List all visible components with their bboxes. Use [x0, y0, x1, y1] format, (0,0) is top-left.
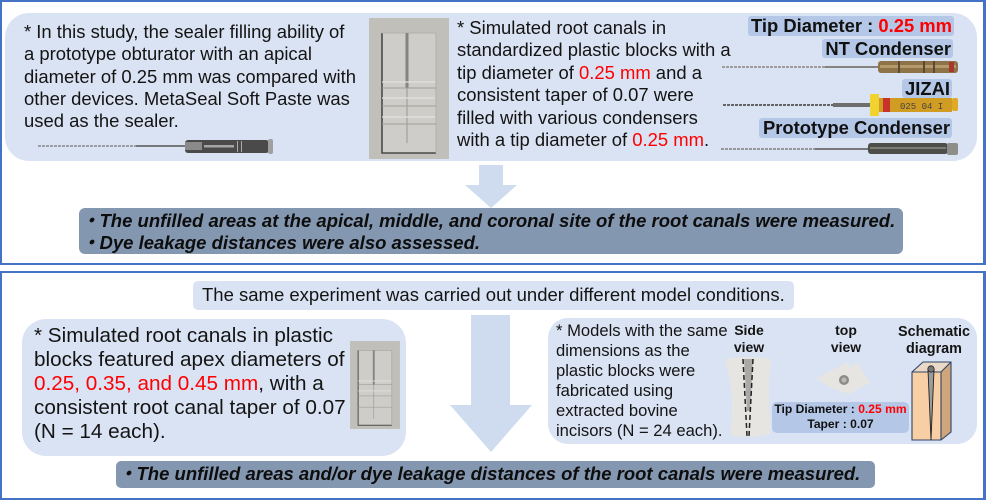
panel: top result	[79, 208, 903, 254]
text: plastic block models: consistent root canal taper of 0.07	[34, 396, 346, 419]
text: bovine incisor models: dimensions as the	[556, 341, 690, 360]
text: bovine incisor models: fabricated using	[556, 381, 673, 400]
panel: top experiment frame	[0, 0, 986, 265]
heading: top view: top	[835, 322, 857, 338]
image: plastic block	[369, 18, 449, 159]
text: study aim: diameter of 0.25 mm was compared with	[24, 66, 356, 87]
text: top result: ・The unfilled areas at the apical, middle, and coronal site of the root canals were measured.	[81, 210, 895, 231]
panel: conditions heading	[193, 281, 794, 310]
heading: side view: view	[734, 339, 764, 355]
text: study aim: other devices. MetaSeal Soft Paste was	[24, 88, 350, 109]
text: simulated root canals: * Simulated root canals in	[457, 16, 666, 38]
label: NT Condenser: NT Condenser	[825, 38, 951, 59]
text: conditions heading: The same experiment was carried out under different model conditions.	[202, 284, 785, 305]
text: simulated root canals	[457, 16, 731, 150]
text: study aim: used as the sealer.	[24, 110, 179, 131]
label: tip diameter: Tip Diameter : 0.25 mm	[751, 15, 952, 36]
panel: plastic block models	[22, 319, 406, 456]
heading: side view: Side	[734, 322, 764, 338]
text: bovine incisor models: incisors (N = 24 each).	[556, 421, 722, 440]
text: study aim: * In this study, the sealer filling ability of	[24, 21, 344, 42]
text: top result	[81, 210, 895, 253]
text: simulated root canals: consistent taper of 0.07 were	[457, 84, 694, 105]
text: simulated root canals: with a tip diameter of 0.25 mm.	[457, 129, 709, 150]
panel: bottom result	[116, 461, 875, 488]
text: top result: ・Dye leakage distances were also assessed.	[81, 232, 480, 253]
label: JIZAI: JIZAI	[905, 78, 950, 99]
text: bovine incisor models: plastic blocks were	[556, 361, 695, 380]
label: Prototype Condenser: Prototype Condenser	[763, 117, 950, 138]
text: bovine incisor models: * Models with the same	[556, 321, 728, 340]
image: tooth top view	[818, 362, 870, 394]
panel: bovine incisor models	[548, 318, 977, 444]
icon: prototype condenser instrument	[721, 143, 958, 155]
image: tooth side view	[725, 357, 771, 437]
heading: top view: view	[831, 339, 861, 355]
label: tip diameter and taper: Taper : 0.07	[807, 417, 874, 431]
text: simulated root canals: standardized plastic blocks with a	[457, 39, 731, 60]
arrow: top flow	[465, 165, 517, 208]
arrow: bottom flow	[450, 315, 532, 452]
text: bovine incisor models	[556, 321, 728, 440]
text: simulated root canals: tip diameter of 0.25 mm and a	[457, 62, 702, 83]
text: bottom result: ・The unfilled areas and/or dye leakage distances of the root canals were measured.	[118, 463, 860, 484]
icon: prototype obturator	[38, 139, 273, 154]
panel: bottom experiment frame	[0, 271, 986, 500]
text: study aim: a prototype obturator with an apical	[24, 43, 312, 64]
heading: schematic diagram	[898, 324, 970, 357]
text: study aim	[24, 21, 356, 131]
panel: study description	[5, 13, 977, 161]
diagram: schematic block	[911, 362, 952, 440]
text: plastic block models: blocks featured apex diameters of	[34, 348, 344, 371]
icon: NT condenser instrument	[722, 61, 958, 73]
heading: side view	[734, 322, 764, 355]
heading: top view	[831, 322, 862, 355]
label: tip diameter and taper	[772, 402, 909, 433]
image: plastic block small	[350, 341, 400, 429]
icon: JIZAI instrument: 025 04 I	[900, 102, 943, 112]
text: simulated root canals: filled with various condensers	[457, 107, 698, 128]
text: plastic block models: (N = 14 each).	[34, 420, 166, 443]
text: plastic block models: * Simulated root canals in plastic	[34, 324, 333, 347]
label: tip diameter and taper: Tip Diameter : 0.25 mm	[774, 402, 907, 416]
icon: JIZAI instrument	[723, 94, 958, 116]
text: bovine incisor models: extracted bovine	[556, 401, 678, 420]
heading: schematic diagram: Schematic	[898, 324, 970, 340]
text: plastic block models: 0.25, 0.35, and 0.45 mm, with a	[34, 372, 324, 395]
heading: schematic diagram: diagram	[906, 341, 962, 357]
text: plastic block models	[34, 324, 346, 443]
